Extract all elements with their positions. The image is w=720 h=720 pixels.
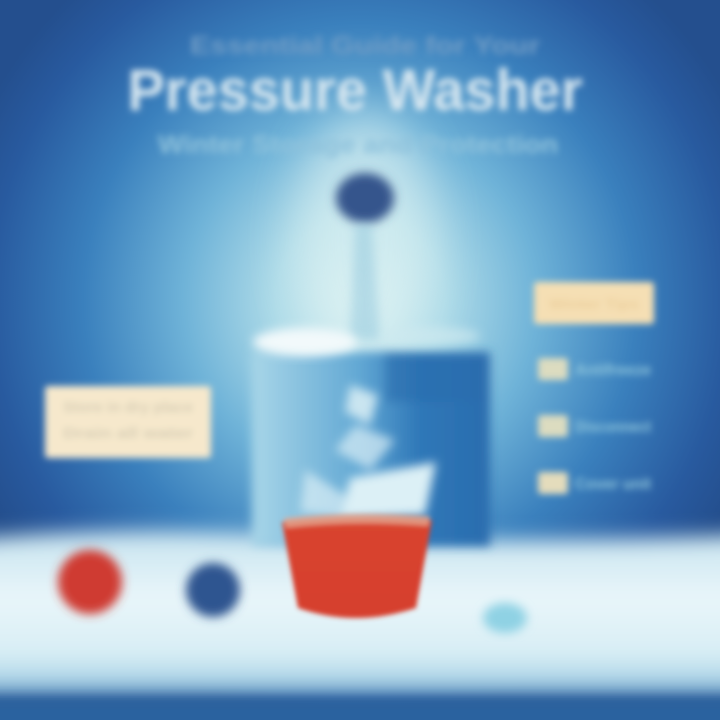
overline text: Essential Guide for Your [190,32,540,60]
title: Pressure Washer [128,58,582,123]
list item 2 [538,415,652,437]
icon: navy ball [186,563,240,617]
plant in snow [300,385,436,518]
bottom band [0,698,720,720]
panel: blue board [252,352,490,546]
subtitle: Winter Storage and Protection [158,131,558,159]
water stream [350,225,380,340]
icon: red pot [282,513,432,618]
snow on board [253,327,480,356]
panel: right list: Winter Tips [549,296,639,313]
list header [534,282,654,324]
list item 1 [538,358,651,380]
snowy ground [0,531,720,696]
icon: red ball [58,550,122,614]
list item 2: Disconnect [575,419,652,436]
list item 3: Cover unit [575,476,652,493]
list item 1: Antifreeze [575,362,651,379]
icon: small blue crystal [483,603,527,633]
light glow [295,110,435,370]
icon: dark circle [336,173,394,223]
heading [128,32,582,159]
callout: left label: Drain all water [63,425,193,442]
list item 3 [538,472,652,494]
callout: left label [45,386,211,458]
panel: right list [534,282,654,494]
callout text: Store in dry place [63,399,193,416]
